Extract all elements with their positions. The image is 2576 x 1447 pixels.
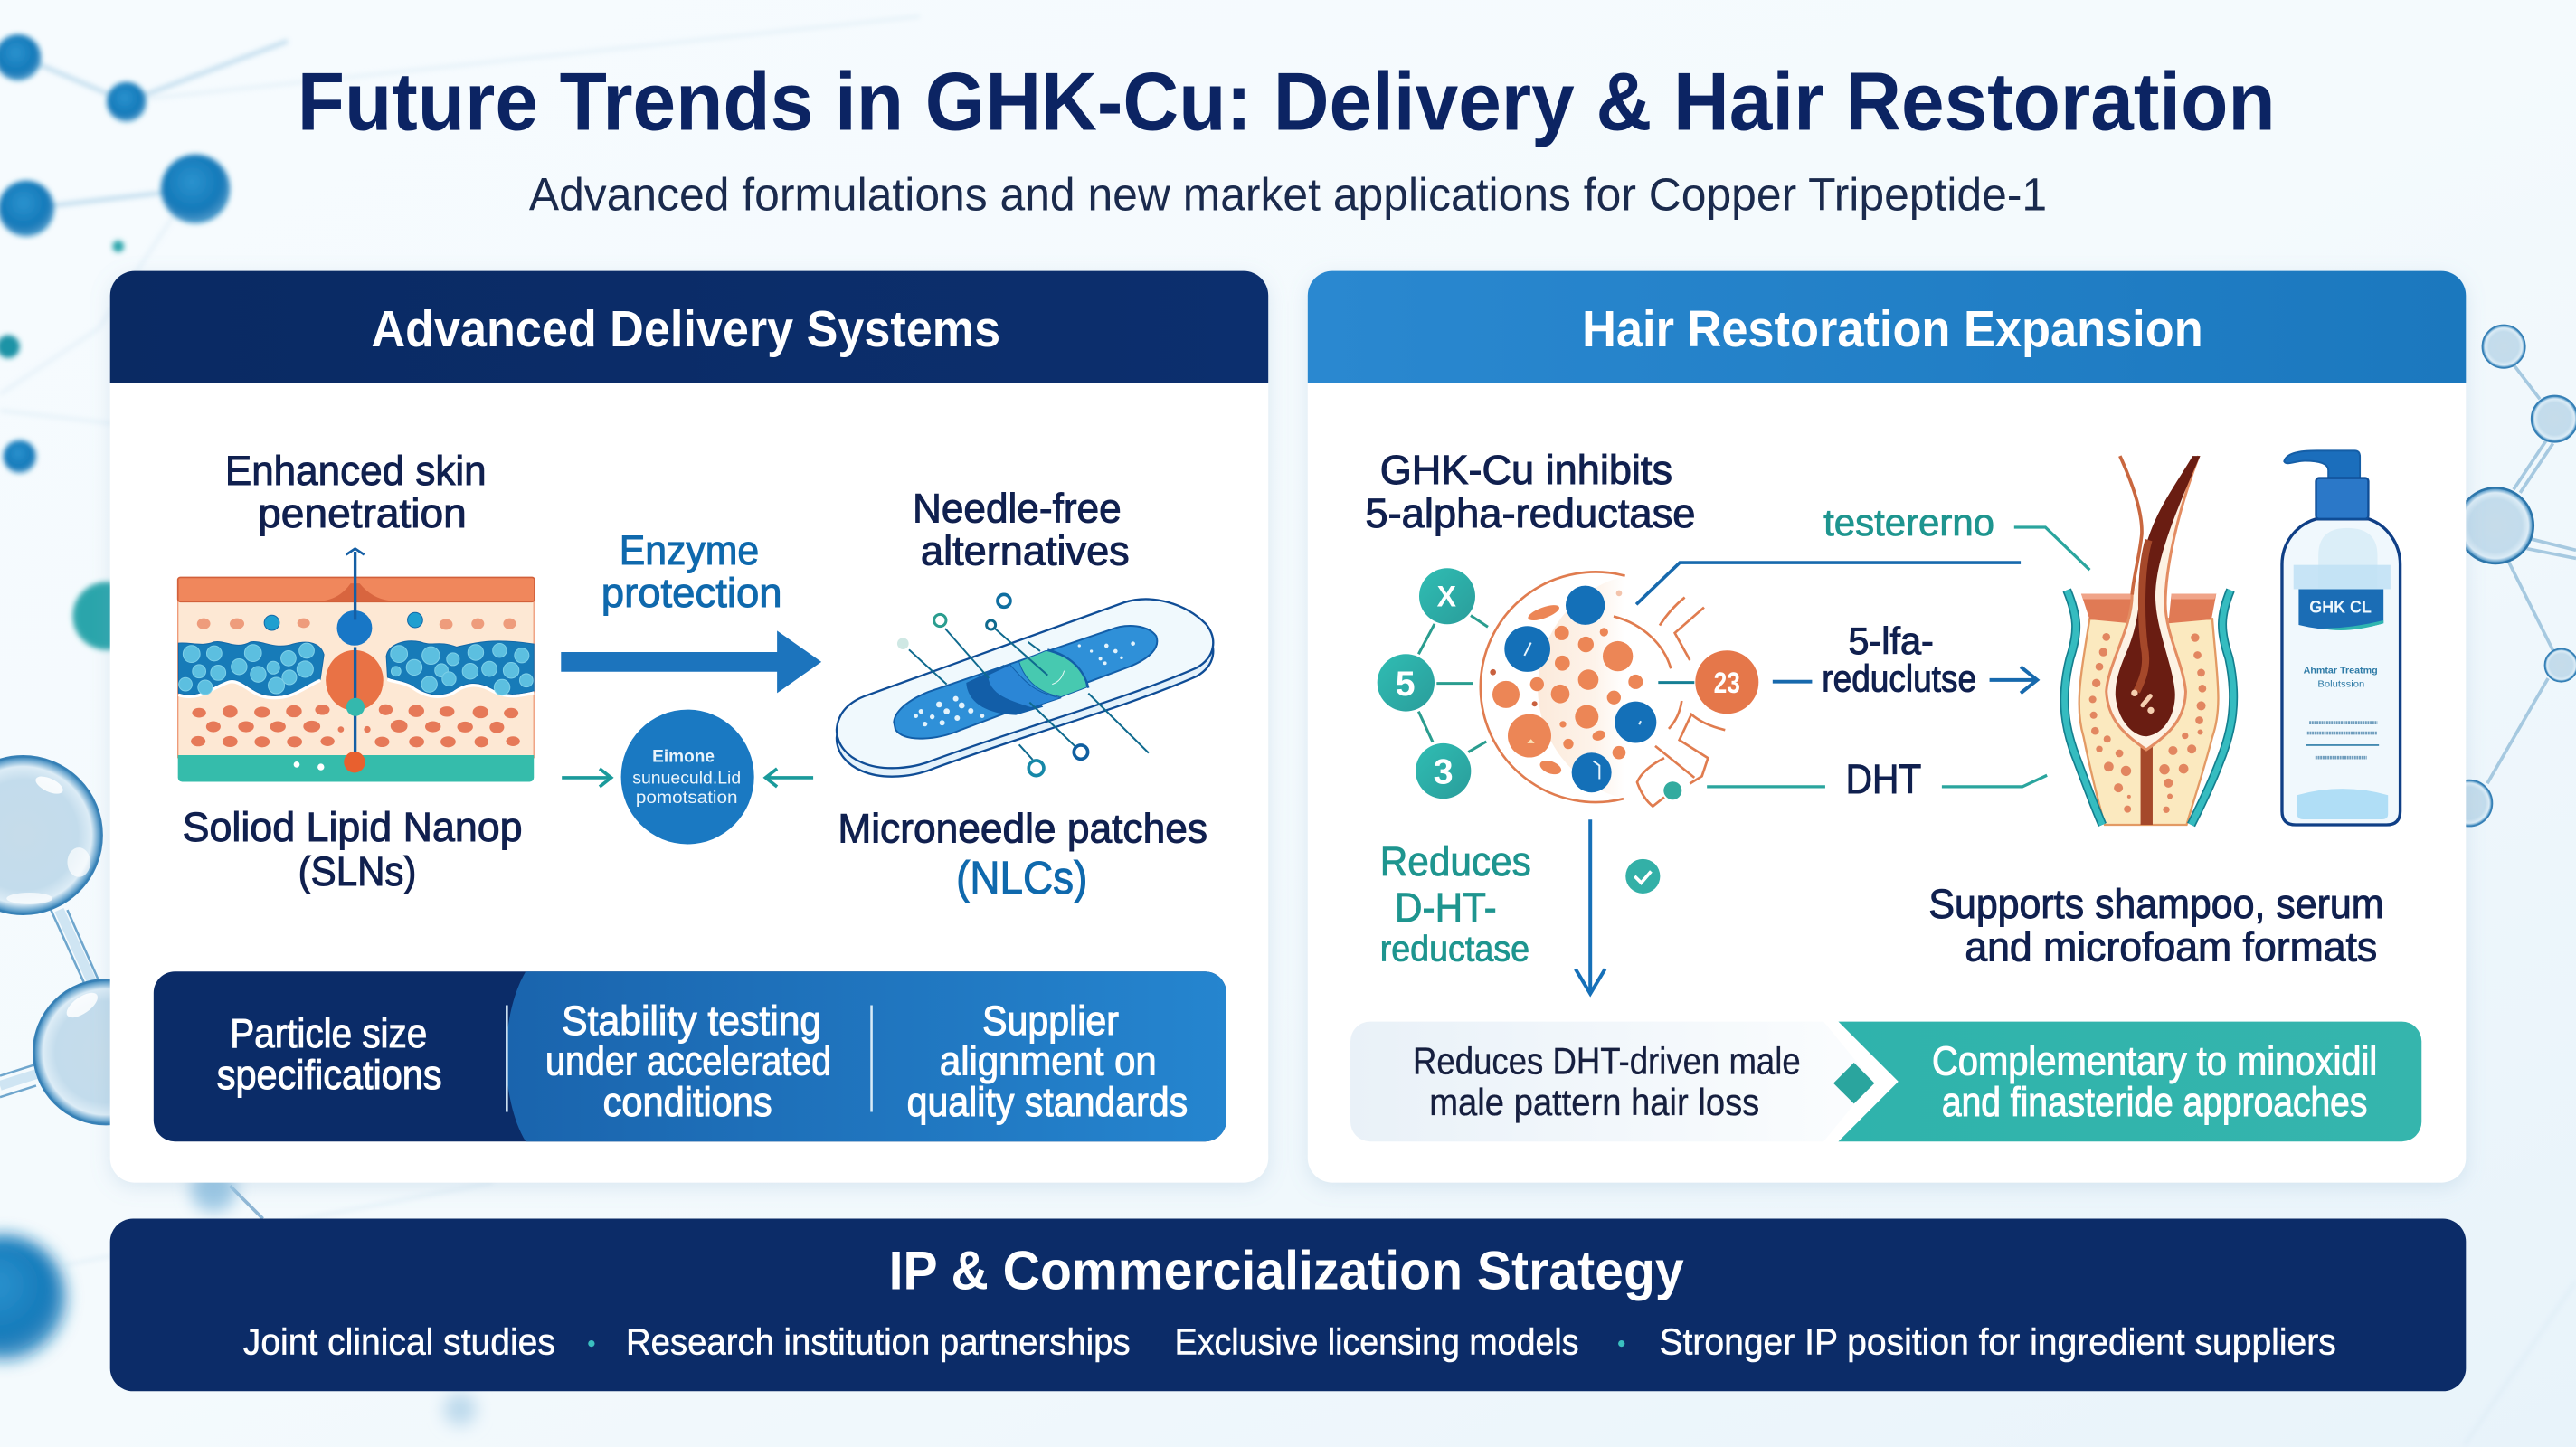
strip: complementary approaches: Complementary to minoxidil — [1932, 1038, 2377, 1084]
strip: reduces DHT-driven hair loss: Reduces DHT-driven male — [1413, 1040, 1801, 1083]
label: DHT: DHT — [1846, 756, 1921, 802]
label: needle-free alternatives — [913, 486, 1130, 574]
strip item: supplier alignment: quality standards — [907, 1079, 1188, 1125]
panel: Advanced Delivery Systems — [110, 271, 1268, 1183]
circle: enzyme stabilised lipid protection: pomotsation — [636, 789, 738, 808]
panel header: advanced delivery — [110, 271, 1268, 383]
illustration: skin layers with nanoparticle — [178, 549, 535, 781]
illustration: GHK-Cu bottle: Bolutssion — [2317, 680, 2364, 690]
label: enzyme protection: Enzyme — [620, 527, 759, 573]
subtitle: Advanced formulations and new market applications for Copper Tripeptide-1 — [529, 168, 2047, 220]
illustration: GHK-Cu bottle — [2282, 450, 2401, 825]
label: solid lipid nanoparticles: Soliod Lipid Nanop — [183, 804, 523, 850]
label: reduces DHT-reductase: reductase — [1380, 929, 1530, 969]
strip item: supplier alignment: Supplier — [982, 998, 1119, 1044]
label: supports formats — [1928, 881, 2383, 969]
illustration: GHK-Cu bottle: Ahmtar Treatmg — [2304, 667, 2378, 676]
illustration: hair follicle — [2064, 456, 2233, 825]
label: enhanced skin penetration: penetration — [258, 490, 467, 536]
strip: reduces DHT-driven hair loss — [1350, 1022, 1873, 1141]
arrow: to follicle — [1773, 667, 2037, 693]
label: needle-free alternatives: alternatives — [921, 528, 1130, 574]
label: reduces DHT-reductase: Reduces — [1380, 838, 1531, 884]
panel header: advanced delivery: Advanced Delivery Systems — [371, 300, 1000, 357]
node: X — [1419, 568, 1475, 624]
label: enhanced skin penetration — [225, 448, 487, 536]
label: enzyme protection: protection — [601, 570, 782, 616]
arrow: small left — [562, 769, 611, 787]
strip item: stability testing: conditions — [603, 1079, 772, 1125]
arrow: enzyme protection — [561, 630, 821, 693]
title: Future Trends in GHK-Cu: Delivery & Hair Restoration — [298, 56, 2276, 147]
arrow: small right — [765, 769, 813, 787]
circle: enzyme stabilised lipid protection — [621, 710, 754, 844]
node: X: X — [1437, 581, 1457, 613]
strip item: particle size — [217, 1010, 442, 1098]
dot — [1618, 1340, 1624, 1347]
label: microneedle patches: Microneedle patches — [838, 806, 1208, 852]
connector: testosterone — [2014, 527, 2089, 570]
node: 3: 3 — [1434, 752, 1454, 792]
node: 23: 23 — [1714, 667, 1740, 699]
label: GHK-Cu inhibits 5-alpha-reductase: GHK-Cu inhibits — [1380, 447, 1672, 493]
strip item: supplier alignment — [907, 998, 1188, 1125]
glass molecule right — [2447, 326, 2576, 827]
strip: complementary approaches: and finasteride approaches — [1942, 1079, 2367, 1125]
label: GHK-Cu inhibits 5-alpha-reductase — [1365, 447, 1695, 536]
panel: IP & Commercialization Strategy — [110, 1219, 2466, 1391]
label: microneedle patches — [838, 806, 1208, 903]
illustration: cell with enzyme nodes — [1378, 568, 1758, 807]
heading: IP strategy: IP & Commercialization Strategy — [889, 1241, 1684, 1301]
item: stronger IP position: Stronger IP position for ingredient suppliers — [1659, 1320, 2336, 1362]
label: testosterone: testererno — [1823, 501, 1994, 544]
panel header: hair restoration: Hair Restoration Expansion — [1582, 300, 2203, 357]
glass molecule left — [0, 756, 178, 1124]
strip item: supplier alignment: alignment on — [940, 1038, 1157, 1084]
panel: Hair Restoration Expansion — [1308, 271, 2466, 1183]
arrow: downward — [1576, 819, 1605, 994]
connector: DHT — [1707, 775, 2047, 787]
item: licensing models: Exclusive licensing models — [1175, 1320, 1578, 1362]
node: 3 — [1416, 743, 1471, 799]
label: supports formats: Supports shampoo, serum — [1928, 881, 2383, 927]
strip item: particle size: Particle size — [230, 1010, 427, 1056]
node: 5 — [1378, 654, 1435, 712]
circle: enzyme stabilised lipid protection: Eimone — [652, 748, 715, 767]
label: reduces DHT-reductase: D-HT- — [1395, 884, 1497, 931]
illustration: GHK-Cu bottle: GHK CL — [2309, 598, 2372, 618]
label: 5-alfa-reductase: reduclutse — [1822, 657, 1976, 700]
illustration: microneedle patch — [837, 594, 1213, 777]
strip item: stability testing: Stability testing — [562, 998, 821, 1044]
connector: blue line to follicle — [1636, 563, 2021, 604]
strip item: stability testing — [545, 998, 831, 1125]
strip: formulation requirements — [154, 971, 1226, 1141]
strip: complementary approaches — [1838, 1022, 2421, 1141]
item: research partnerships: Research institution partnerships — [626, 1320, 1131, 1362]
circle: enzyme stabilised lipid protection: sunueculd.Lid — [632, 769, 741, 788]
item: joint clinical studies: Joint clinical studies — [243, 1320, 555, 1362]
strip item: stability testing: under accelerated — [545, 1038, 831, 1084]
label: 5-alfa-reductase: 5-lfa- — [1848, 619, 1934, 662]
node: 23 — [1695, 650, 1758, 714]
label: needle-free alternatives: Needle-free — [913, 486, 1122, 532]
label: enhanced skin penetration: Enhanced skin — [225, 448, 487, 494]
dot — [588, 1340, 595, 1347]
label: enzyme protection — [601, 527, 782, 616]
icon: diamond — [1833, 1063, 1874, 1103]
label: 5-alfa-reductase — [1822, 619, 1976, 700]
label: reduces DHT-reductase — [1380, 838, 1531, 969]
label: supports formats: and microfoam formats — [1965, 923, 2377, 969]
node: 5: 5 — [1396, 664, 1416, 704]
label: solid lipid nanoparticles: (SLNs) — [298, 848, 416, 894]
icon: check badge — [1625, 859, 1660, 894]
strip item: particle size: specifications — [217, 1052, 442, 1098]
label: solid lipid nanoparticles — [183, 804, 523, 894]
panel header: hair restoration — [1308, 271, 2466, 383]
strip: reduces DHT-driven hair loss: male pattern hair loss — [1429, 1081, 1759, 1123]
label: GHK-Cu inhibits 5-alpha-reductase: 5-alpha-reductase — [1365, 490, 1695, 536]
label: microneedle patches: (NLCs) — [956, 852, 1087, 903]
